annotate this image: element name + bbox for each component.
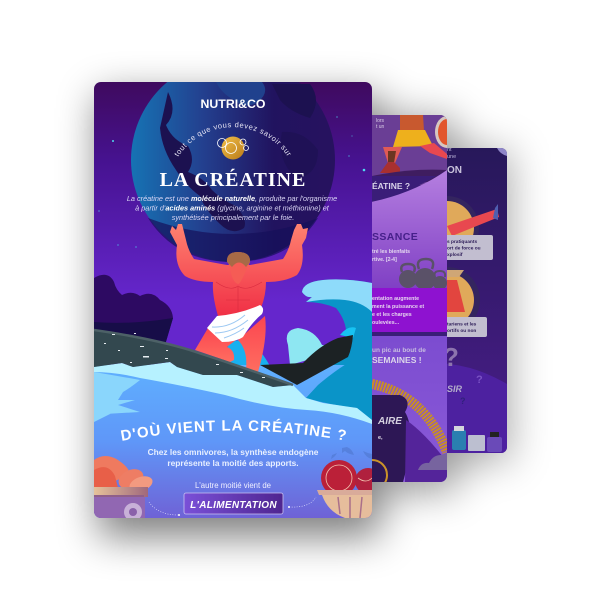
dotted arrows bbox=[149, 497, 316, 516]
question mark decorations: ? bbox=[443, 342, 459, 372]
logo: NUTRI&CO bbox=[201, 97, 266, 111]
section heading: D'OÙ VIENT LA CRÉATINE ? bbox=[120, 418, 346, 441]
paragraph: benefits: tré les bienfaits bbox=[372, 249, 410, 255]
wave behind bbox=[225, 279, 372, 405]
hero figure bbox=[170, 224, 308, 372]
dark cloud bbox=[94, 275, 173, 345]
dark heading band bbox=[372, 172, 444, 185]
card heading: choisir: SIR bbox=[447, 384, 463, 394]
back leg bbox=[238, 316, 266, 372]
icon: creatine molecule bbox=[218, 136, 248, 160]
paragraph: power increase: entation augmente bbox=[372, 296, 419, 302]
torso and arms bbox=[170, 224, 308, 316]
pectoral lines bbox=[216, 282, 262, 312]
card text fragment: nt bbox=[447, 147, 452, 153]
heading text: créatine: ÉATINE ? bbox=[372, 181, 410, 191]
athlete circle illustration bbox=[447, 196, 499, 235]
globe shadow band bbox=[148, 218, 318, 262]
heading text: puissance: SSANCE bbox=[372, 231, 418, 243]
text: other half: L'autre moitié vient de bbox=[195, 481, 271, 490]
text fragment top left: t un bbox=[376, 124, 385, 130]
callout: vegetarians: ortifs ou non bbox=[447, 328, 476, 334]
paragraph: power increase: oulevées... bbox=[372, 320, 400, 326]
wave right foreground bbox=[306, 350, 372, 420]
intro paragraph: synthétisée principalement par le foie. bbox=[172, 213, 294, 222]
hair bbox=[227, 252, 250, 267]
rock bbox=[94, 330, 293, 387]
callout: strength athletes: xplosif bbox=[447, 252, 463, 258]
button: l'alimentation: L'ALIMENTATION bbox=[190, 500, 277, 511]
button: l'alimentation bbox=[184, 493, 283, 514]
heading text: aire: AIRE bbox=[377, 416, 402, 427]
section text: Chez les omnivores, la synthèse endogène bbox=[148, 447, 319, 457]
paragraph: power increase: e et les charges bbox=[372, 312, 412, 318]
lower violet section bbox=[372, 336, 447, 482]
title: LA CRÉATINE bbox=[160, 168, 306, 191]
card text fragment: une bbox=[447, 154, 456, 160]
callout: strength athletes bbox=[447, 235, 493, 260]
text fragment top left: lors bbox=[376, 118, 385, 124]
panel: back card bbox=[447, 148, 507, 453]
head bbox=[228, 252, 250, 284]
paragraph: power increase: ment la puissance et bbox=[372, 304, 424, 310]
fish silhouettes bbox=[331, 447, 372, 459]
meat on pillar left bbox=[94, 456, 155, 521]
foam bbox=[94, 362, 372, 424]
arched subtitle: tout ce que vous devez savoir sur bbox=[174, 122, 291, 156]
kettlebells icon bbox=[399, 259, 447, 290]
intro paragraph: à partir d'acides aminés (glycine, arginine et méthionine) et bbox=[135, 204, 329, 212]
stars bbox=[98, 116, 365, 248]
loincloth bbox=[207, 305, 263, 342]
magenta highlight band bbox=[372, 288, 447, 332]
callout: vegetarians bbox=[447, 317, 487, 337]
rock speckles bbox=[104, 333, 265, 378]
infographic: stacked cards bbox=[70, 66, 535, 566]
panel: main card bbox=[94, 82, 372, 518]
section text: représente la moitié des apports. bbox=[167, 458, 299, 468]
card heading fragment: ON bbox=[447, 165, 462, 176]
callout: strength athletes: ort de force ou bbox=[447, 246, 481, 252]
dark silhouette bbox=[372, 395, 409, 482]
question mark decorations: ? bbox=[476, 374, 483, 386]
paragraph: benefits: rtive. [2-4] bbox=[372, 257, 397, 263]
callout: strength athletes: s pratiquants bbox=[447, 239, 477, 245]
globe continents bbox=[160, 82, 318, 231]
drop shadows bbox=[98, 95, 511, 537]
text: peak after weeks: SEMAINES ! bbox=[372, 355, 422, 365]
question mark decorations bbox=[447, 348, 482, 404]
black rock tail bbox=[260, 335, 353, 385]
question mark decorations: ? bbox=[460, 396, 466, 406]
front leg bbox=[195, 328, 236, 362]
text: peak after weeks: un pic au bout de bbox=[372, 347, 426, 354]
vegetarian circle illustration bbox=[447, 267, 480, 317]
purple power section bbox=[372, 170, 447, 288]
golden woven arc bbox=[372, 384, 447, 452]
gold ring bbox=[372, 459, 388, 482]
sea bbox=[94, 365, 372, 518]
callout: vegetarians: tariens et les bbox=[447, 322, 477, 328]
supplement bottles bbox=[452, 426, 502, 452]
text fragment: e, bbox=[378, 435, 383, 441]
globe bbox=[131, 82, 335, 262]
warrior illustration bbox=[372, 115, 447, 182]
gray cloud bbox=[418, 453, 447, 470]
intro paragraph: La créatine est une molécule naturelle, produite par l'organisme bbox=[127, 194, 337, 203]
panel: middle card bbox=[372, 115, 447, 482]
small wave bbox=[287, 328, 335, 365]
meat in bowl right bbox=[317, 460, 381, 518]
